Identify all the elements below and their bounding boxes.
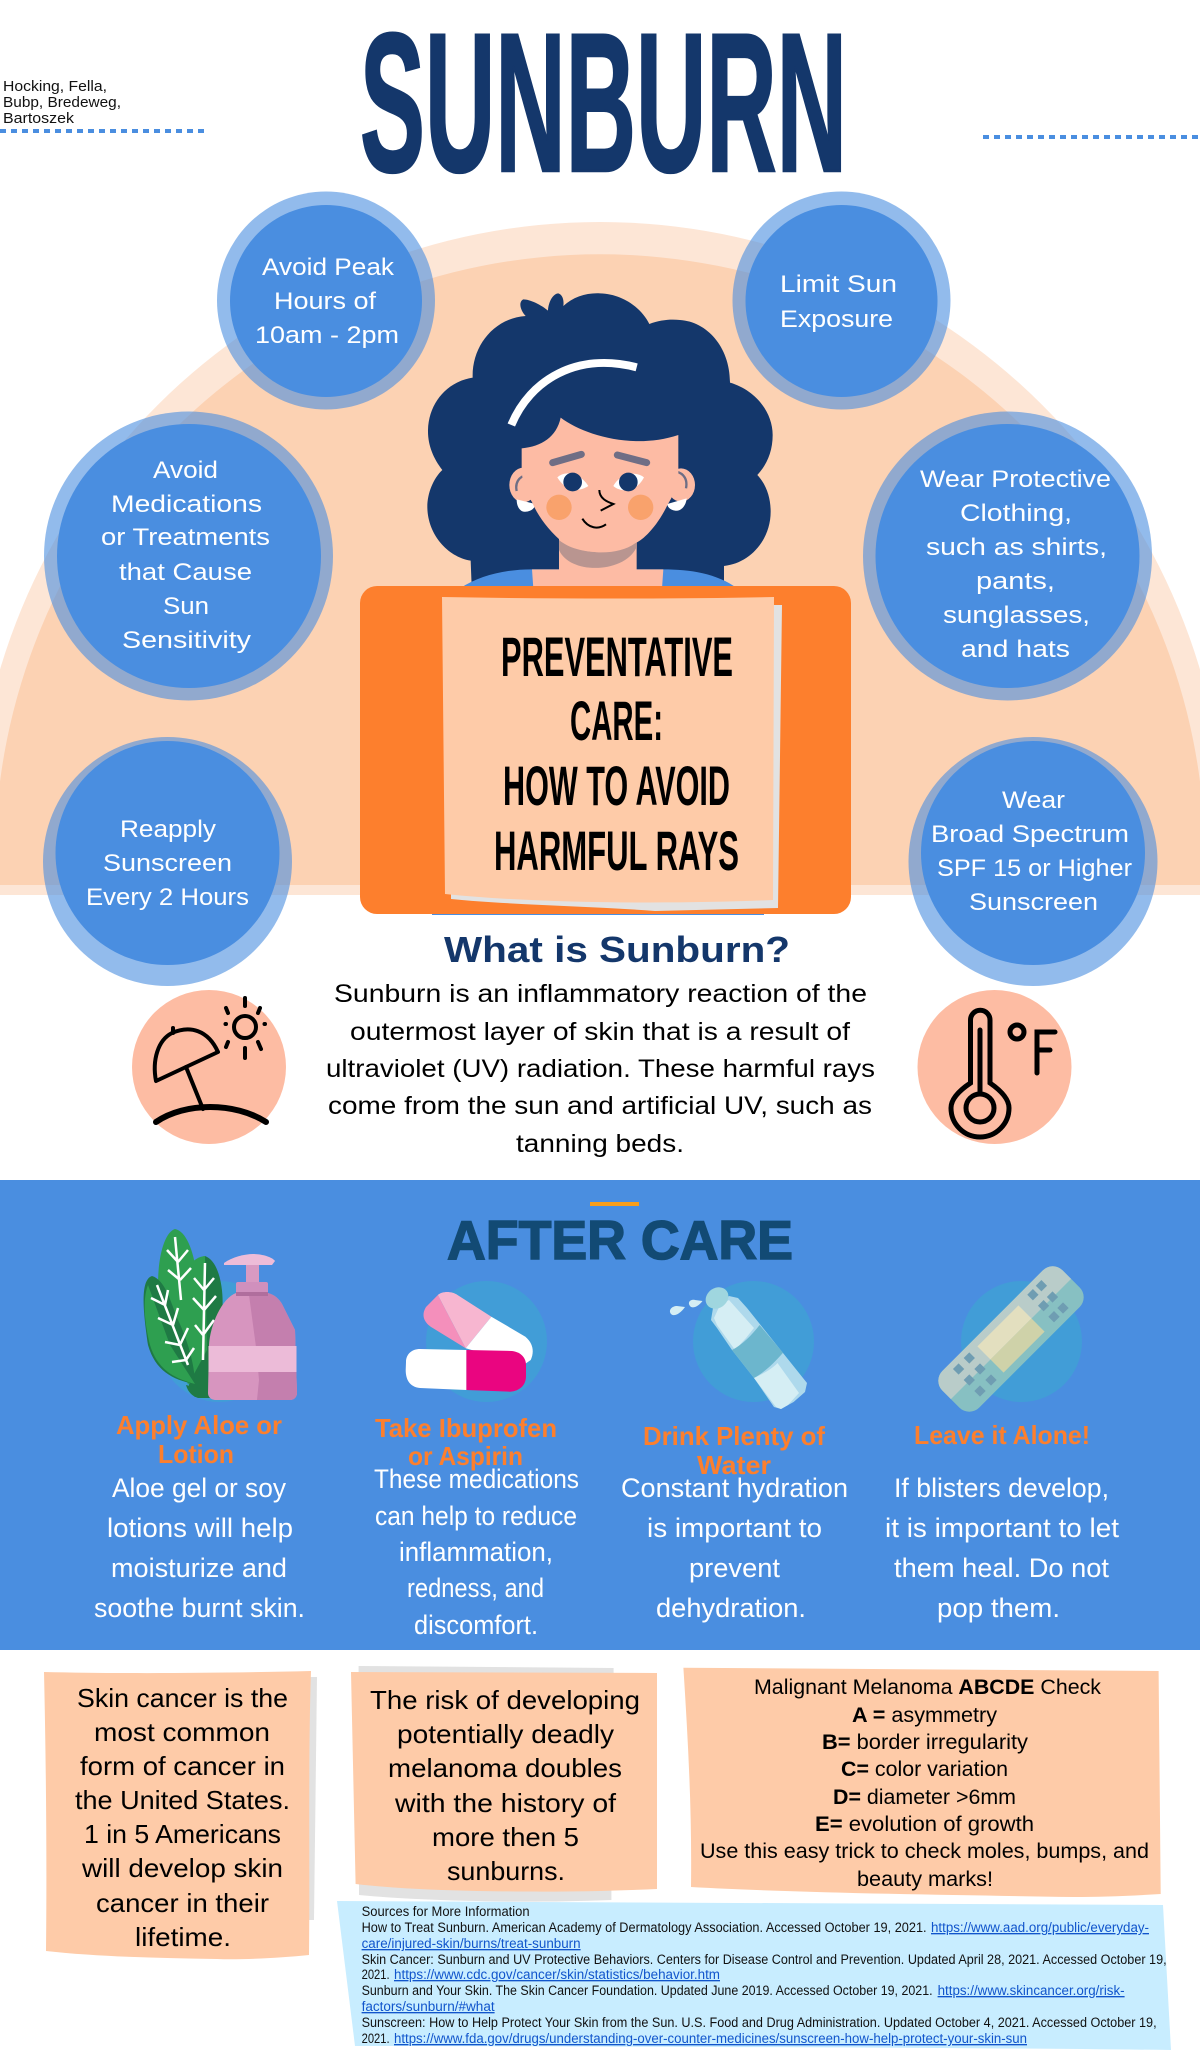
card: melanoma risk fact: with the history of — [394, 1788, 617, 1818]
callout circle: avoid medications: Avoid — [153, 457, 218, 484]
callout circle: broad spectrum sunscreen: Sunscreen — [969, 889, 1098, 916]
care step: aloe: lotions will help — [107, 1513, 293, 1543]
callout circle: broad spectrum sunscreen: SPF 15 or Higher — [937, 855, 1132, 882]
sun arch background — [0, 222, 1200, 895]
care step: ibuprofen — [374, 1413, 579, 1640]
callout circle: broad spectrum sunscreen: Broad Spectrum — [931, 821, 1129, 848]
panel: sources: Sources for More Information — [362, 1904, 530, 1919]
care step: aloe: Lotion — [158, 1439, 234, 1469]
callout circle: avoid medications — [44, 412, 333, 700]
neck and chest — [532, 533, 663, 588]
sign heading text: HARMFUL RAYS — [494, 819, 739, 882]
callout circle: wear protective clothing: Clothing, — [960, 500, 1072, 527]
callout circle: wear protective clothing: Wear Protective — [920, 466, 1111, 493]
authors: Hocking, Fella, — [3, 78, 107, 95]
authors: Bartoszek — [3, 110, 75, 127]
panel: sources: factors/sunburn/#what — [362, 1999, 495, 2014]
callout circle: reapply sunscreen: Every 2 Hours — [86, 884, 249, 911]
callout circle: avoid medications: Sun — [163, 593, 209, 620]
care step: ibuprofen: These medications — [374, 1464, 579, 1494]
hair — [427, 293, 773, 587]
care step: ibuprofen: discomfort. — [414, 1610, 538, 1640]
callout circle: broad spectrum sunscreen — [908, 737, 1158, 986]
card: skin cancer fact: Skin cancer is the — [77, 1683, 288, 1713]
card: ABCDE check: Malignant Melanoma ABCDE Check — [754, 1675, 1101, 1699]
ears — [509, 468, 537, 502]
callout circle: wear protective clothing: pants, — [976, 568, 1055, 595]
callout circle: reapply sunscreen: Reapply — [120, 816, 216, 843]
care step: ibuprofen: Take Ibuprofen — [375, 1413, 557, 1443]
care step: leave it alone: them heal. Do not — [894, 1553, 1109, 1583]
card: ABCDE check: B= border irregularity — [822, 1730, 1028, 1754]
callout circle: avoid peak hours: Avoid Peak — [262, 254, 395, 281]
care step: aloe — [94, 1410, 305, 1623]
panel: sources: Skin Cancer: Sunburn and UV Protective Behaviors. Centers for Disease Control and Prevention. Updated April 28, 2021. Accessed October 19, — [362, 1952, 1167, 1967]
callout circle: limit sun exposure: Exposure — [780, 306, 893, 333]
heading: after care: AFTER CARE — [447, 1209, 793, 1271]
icon: pills — [406, 1281, 547, 1402]
eyes — [557, 473, 644, 490]
panel: sources: Sunburn and Your Skin. The Skin Cancer Foundation. Updated June 2019. Accessed October 19, 2021. — [362, 1983, 933, 1998]
sign heading text: HOW TO AVOID — [503, 754, 730, 817]
care step: aloe: moisturize and — [111, 1553, 287, 1583]
care step: water: Water — [697, 1450, 771, 1480]
card: melanoma risk fact: potentially deadly — [397, 1719, 614, 1749]
face — [522, 418, 678, 552]
sign heading text — [494, 625, 739, 882]
panel: preventative care sign — [360, 586, 851, 915]
icon: aloe and lotion bottle — [144, 1229, 297, 1402]
callout circle: avoid peak hours: Hours of — [274, 288, 376, 315]
care step: leave it alone — [885, 1420, 1120, 1623]
care step: aloe: Aloe gel or soy — [112, 1473, 286, 1503]
card: skin cancer fact: cancer in their — [96, 1888, 269, 1918]
callout circle: broad spectrum sunscreen: Wear — [1002, 787, 1065, 814]
earrings — [517, 498, 687, 512]
panel: sources: Sunscreen: How to Help Protect Your Skin from the Sun. U.S. Food and Drug Administration. Updated October 4, 2021. Accessed October 19, — [362, 2015, 1157, 2030]
callout circle: avoid medications: that Cause — [119, 559, 252, 586]
care step: water: Constant hydration — [621, 1473, 848, 1503]
callout circle: avoid peak hours — [217, 192, 435, 410]
authors — [3, 78, 121, 127]
care step: ibuprofen: can help to reduce — [375, 1501, 577, 1531]
card: skin cancer fact: the United States. — [75, 1785, 290, 1815]
care step: leave it alone: Leave it Alone! — [914, 1420, 1090, 1450]
care step: leave it alone: it is important to let — [885, 1513, 1120, 1543]
card: melanoma risk fact: melanoma doubles — [388, 1753, 622, 1783]
card: ABCDE check: C= color variation — [841, 1757, 1008, 1781]
heading: what is sunburn: What is Sunburn? — [444, 929, 790, 970]
panel: sources: 2021. — [362, 1967, 390, 1982]
care step: aloe: soothe burnt skin. — [94, 1593, 305, 1623]
callout circle: avoid medications: Sensitivity — [122, 627, 251, 654]
panel: after care band — [0, 1180, 1200, 1650]
callout circle: wear protective clothing: sunglasses, — [943, 602, 1090, 629]
text block: sunburn definition: Sunburn is an inflammatory reaction of the — [334, 980, 867, 1008]
hair highlight — [511, 363, 637, 425]
sign heading text: CARE: — [570, 689, 663, 752]
text block: sunburn definition: tanning beds. — [516, 1130, 684, 1158]
panel: sources — [337, 1901, 1171, 2050]
callout circle: wear protective clothing: and hats — [961, 636, 1070, 663]
callout circle: avoid medications: or Treatments — [101, 524, 270, 551]
card: ABCDE check — [683, 1668, 1161, 1897]
sign heading text: PREVENTATIVE — [501, 625, 733, 688]
card: ABCDE check: D= diameter >6mm — [833, 1785, 1016, 1809]
card: skin cancer fact — [44, 1671, 317, 1959]
card: skin cancer fact: 1 in 5 Americans — [84, 1819, 281, 1849]
text block: sunburn definition: ultraviolet (UV) radiation. These harmful rays — [326, 1055, 875, 1083]
panel: sources: How to Treat Sunburn. American Academy of Dermatology Association. Accessed October 19, 2021. — [362, 1920, 927, 1935]
panel: sources: https://www.fda.gov/drugs/understanding-over-counter-medicines/sunscreen-how-help-protect-your-skin-sun — [394, 2031, 1027, 2046]
care step: water: Drink Plenty of — [643, 1421, 825, 1451]
callout circle: avoid peak hours: 10am - 2pm — [255, 322, 399, 349]
care step: leave it alone: pop them. — [937, 1593, 1060, 1623]
callout circle: limit sun exposure: Limit Sun — [780, 271, 897, 298]
callout circle: wear protective clothing — [863, 412, 1152, 700]
callout circle: limit sun exposure — [732, 192, 950, 410]
illustration: woman character — [427, 293, 773, 588]
callout circle: reapply sunscreen: Sunscreen — [103, 850, 232, 877]
authors: Bubp, Bredeweg, — [3, 94, 121, 111]
panel: sources: 2021. — [362, 2031, 390, 2046]
icon: beach umbrella and sun — [132, 990, 286, 1144]
card: ABCDE check: A = asymmetry — [852, 1703, 997, 1727]
card: melanoma risk fact — [351, 1666, 657, 1902]
care step: water: is important to — [647, 1513, 822, 1543]
cheeks — [546, 495, 572, 520]
panel: sources: care/injured-skin/burns/treat-sunburn — [362, 1936, 581, 1951]
care step: water: dehydration. — [656, 1593, 806, 1623]
panel: sources: https://www.aad.org/public/everyday- — [931, 1920, 1149, 1935]
icon: thermometer — [918, 990, 1072, 1144]
care step: ibuprofen: inflammation, — [399, 1537, 553, 1567]
card: melanoma risk fact: sunburns. — [447, 1856, 565, 1886]
card: melanoma risk fact: more then 5 — [432, 1822, 579, 1852]
callout circle: reapply sunscreen — [43, 737, 292, 986]
text block: sunburn definition — [326, 980, 875, 1158]
card: melanoma risk fact: The risk of developing — [370, 1685, 640, 1715]
card: skin cancer fact: will develop skin — [81, 1853, 283, 1883]
care step: ibuprofen: or Aspirin — [408, 1441, 523, 1471]
text block: sunburn definition: outermost layer of skin that is a result of — [350, 1018, 850, 1046]
eyebrows — [553, 454, 647, 463]
icon: bandage — [933, 1261, 1089, 1417]
card: ABCDE check: Use this easy trick to check moles, bumps, and — [700, 1839, 1149, 1863]
card: skin cancer fact: most common — [94, 1717, 270, 1747]
care step: water — [621, 1421, 848, 1623]
care step: ibuprofen: redness, and — [407, 1573, 544, 1603]
callout circle: avoid medications: Medications — [111, 491, 262, 518]
shirt — [460, 569, 737, 588]
text block: sunburn definition: come from the sun and artificial UV, such as — [328, 1092, 872, 1120]
icon: water bottle — [670, 1281, 814, 1409]
panel: sources: https://www.skincancer.org/risk- — [938, 1983, 1125, 1998]
nose and mouth — [582, 490, 613, 528]
callout circle: wear protective clothing: such as shirts, — [926, 534, 1107, 561]
neck shadow — [559, 540, 636, 568]
card: skin cancer fact: lifetime. — [135, 1922, 231, 1952]
care step: leave it alone: If blisters develop, — [894, 1473, 1109, 1503]
panel: sources: https://www.cdc.gov/cancer/skin/statistics/behavior.htm — [394, 1967, 720, 1982]
care step: water: prevent — [689, 1553, 780, 1583]
card: skin cancer fact: form of cancer in — [80, 1751, 285, 1781]
card: ABCDE check: beauty marks! — [857, 1867, 993, 1891]
care step: aloe: Apply Aloe or — [116, 1410, 282, 1440]
card: ABCDE check: E= evolution of growth — [815, 1812, 1034, 1836]
